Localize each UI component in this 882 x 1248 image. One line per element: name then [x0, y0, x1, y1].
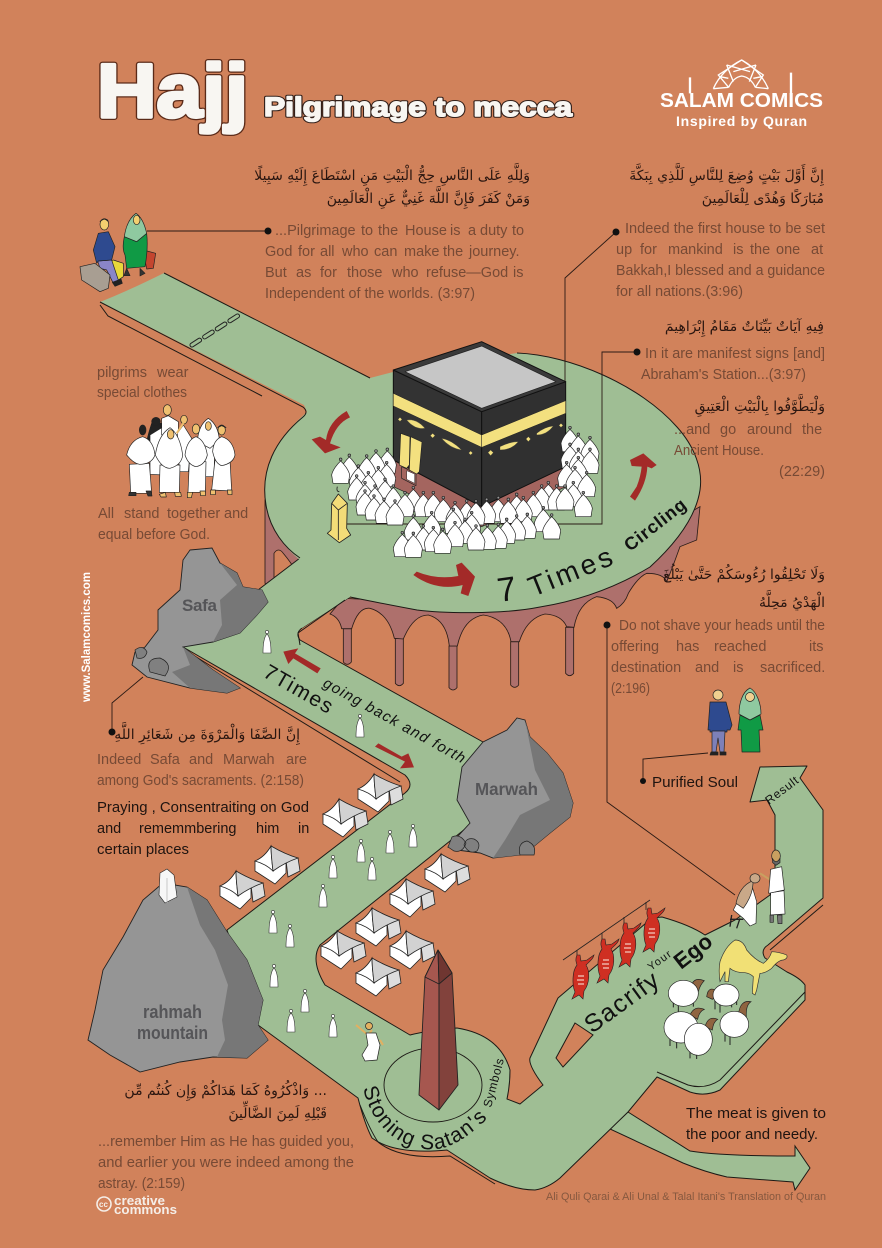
abraham's station verse: فِيهِ آيَاتٌ بَيِّنَاتٌ مَقَامُ إِبْرَاهِيمَ — [665, 318, 824, 337]
verse text 3:96: at — [811, 242, 823, 258]
label: sacrify your ego — [579, 773, 802, 1039]
equality note — [98, 506, 248, 543]
abraham's station verse: Abraham's Station...(3:97) — [641, 367, 806, 383]
salam comics logo: SALAM COMICS — [660, 90, 823, 112]
verse text 3:97: duty — [480, 223, 508, 239]
red arrows on the safa-marwah road — [283, 648, 414, 768]
verse text 3:97: journey. — [468, 244, 520, 260]
abraham's station verse: In it are manifest signs [and] — [645, 346, 825, 362]
circling verse 22:29: the — [802, 422, 822, 438]
arches under circling platform — [265, 500, 700, 690]
verse text 3:97 — [264, 223, 524, 302]
label: stoning satan's symbols — [364, 1057, 507, 1150]
title: Hajj — [97, 49, 248, 134]
purified man and woman — [708, 688, 763, 755]
circling verse 22:29: go — [720, 422, 736, 438]
verse text 3:97: refuse—God — [426, 265, 508, 281]
arabic verse 3:97: وَلِلَّهِ عَلَى النَّاسِ حِجُّ الْبَيْتِ مَنِ اسْتَطَاعَ إِلَيْهِ سَبِيلًا — [254, 163, 530, 186]
verse text 3:96: mankind — [668, 242, 723, 258]
label: going back and forth: 7Times — [260, 660, 337, 718]
arabic verse 3:96: إِنَّ أَوَّلَ بَيْتٍ وُضِعَ لِلنَّاسِ لَلَّذِي بِبَكَّةَ — [629, 163, 825, 186]
remember verse 2:159: astray. (2:159) — [98, 1176, 185, 1192]
arabic verse 3:97: وَمَنْ كَفَرَ فَإِنَّ اللَّهَ غَنِيٌّ عَنِ الْعَالَمِينَ — [327, 186, 530, 209]
label: sacrify your ego: Sacrify — [579, 966, 665, 1039]
shaving verse 2:196: and — [695, 660, 719, 676]
label: 7 times circling: 7 — [495, 570, 519, 610]
verse text 3:96: for — [640, 242, 657, 258]
label: stoning satan's symbols: Stoning Satan's — [364, 1086, 486, 1150]
verse text 3:97: a — [468, 223, 477, 239]
circling verse 22:29: Ancient House. — [674, 443, 764, 459]
verse text 3:97: those — [347, 265, 382, 281]
abraham's station verse — [634, 318, 825, 383]
verse text 3:97: to — [512, 223, 524, 239]
road and platform edge lines — [100, 273, 823, 1184]
verse text 3:96: up — [616, 242, 632, 258]
verse text 3:97: Independent of the worlds. (3:97) — [265, 286, 475, 302]
translation credit: Ali Quli Qarai & Ali Unal & Talal Itani's Translation of Quran — [546, 1191, 826, 1203]
sheep flock — [664, 979, 751, 1059]
creative commons mark: commons — [114, 1202, 177, 1217]
praying note: him — [256, 821, 279, 837]
verse text 3:97: all — [320, 244, 335, 260]
traveling pilgrims with luggage — [80, 213, 156, 292]
safa marwah verse 2:158: Safa — [150, 752, 181, 768]
verse text 3:97: House — [405, 223, 447, 239]
shaving verse 2:196: destination — [611, 660, 681, 676]
maqam ibrahim — [327, 487, 351, 543]
leader lines — [112, 231, 735, 895]
circling verse 22:29: (22:29) — [779, 464, 825, 480]
praying note: certain places — [97, 842, 189, 858]
verse text 3:97: for — [320, 265, 337, 281]
road dashes — [192, 315, 239, 345]
pilgrims clothing note: wear — [156, 365, 189, 381]
pilgrims clothing note — [97, 365, 189, 401]
verse text 3:97: is — [513, 265, 523, 281]
rahmah mountain: rahmah — [143, 1002, 202, 1022]
arabic verse 3:97 — [254, 163, 530, 209]
praying note: Praying , Consentraiting on God — [97, 800, 309, 816]
circling verse 22:29 — [674, 394, 825, 480]
shaving verse 2:196 — [604, 564, 825, 697]
pilgrims clothing note: special clothes — [97, 385, 187, 401]
shaving verse 2:196: has — [676, 639, 699, 655]
shaving verse 2:196: offering — [611, 639, 659, 655]
red arrows around the kaaba — [312, 411, 657, 596]
verse text 3:96: Indeed the first house to be set — [625, 221, 825, 237]
white-robed pilgrims group — [127, 405, 235, 498]
tents — [220, 774, 470, 996]
safa rock — [132, 548, 268, 693]
salam comics logo — [660, 60, 823, 129]
green pilgrimage route — [183, 558, 823, 1190]
salam comics logo: Inspired by Quran — [676, 113, 807, 129]
circling verse 22:29: وَلْيَطَّوَّفُوا بِالْبَيْتِ الْعَتِيقِ — [695, 394, 825, 417]
verse text 3:96: one — [776, 242, 800, 258]
safa marwah verse 2:158: Indeed — [97, 752, 141, 768]
verse text 3:97: who — [391, 265, 419, 281]
carcasses on rope — [563, 900, 665, 999]
shaving verse 2:196: its — [809, 639, 824, 655]
title: Hajj — [97, 49, 248, 134]
label: 7 times circling: Times — [524, 541, 617, 603]
safa marwah verse 2:158: إِنَّ الصَّفَا وَالْمَرْوَةَ مِن شَعَائِرِ اللَّهِ — [114, 722, 301, 745]
shaving verse 2:196: Do not shave your heads until the — [619, 618, 825, 634]
stoning ring — [384, 1048, 482, 1122]
verse text 3:97: is — [450, 223, 460, 239]
label: stoning satan's symbols: Symbols — [480, 1057, 507, 1109]
praying note — [97, 800, 309, 858]
remember verse 2:159: قَبْلِهِ لَمِنَ الضَّالِّينَ — [228, 1101, 327, 1122]
label: sacrify your ego: Ego — [669, 928, 717, 974]
website url: www.Salamcomics.com — [81, 572, 93, 703]
verse text 3:97: who — [341, 244, 369, 260]
equality note: stand — [124, 506, 159, 522]
pilgrim crowd circling the kaaba — [332, 426, 599, 557]
camel — [719, 940, 787, 995]
rahmah mountain — [88, 869, 268, 1072]
label: going back and forth: going back and forth — [320, 675, 468, 767]
equality note: and — [224, 506, 248, 522]
title — [97, 49, 573, 134]
verse text 3:97: But — [265, 265, 287, 281]
safa marwah verse 2:158: and — [189, 752, 213, 768]
marwah rock — [448, 718, 573, 858]
safa marwah verse 2:158: are — [286, 752, 307, 768]
stone-throwing pilgrim — [356, 1022, 383, 1061]
kaaba — [393, 342, 566, 527]
verse text 3:97: the — [378, 223, 398, 239]
title: Pilgrimage to mecca — [264, 92, 573, 122]
circling verse 22:29: around — [747, 422, 792, 438]
verse text 3:96: Bakkah,I blessed and a guidance — [616, 263, 825, 279]
arrow: meat to the poor — [610, 1112, 810, 1190]
safa marwah verse 2:158: Marwah — [223, 752, 275, 768]
verse text 3:97: for — [298, 244, 315, 260]
arabic verse 3:96: مُبَارَكًا وَهُدًى لِلْعَالَمِينَ — [702, 188, 824, 207]
route hole beside sacrifice platform — [556, 1023, 593, 1067]
label: going back and forth — [260, 660, 468, 767]
head-shaving pair — [730, 850, 785, 928]
meat note — [686, 1106, 826, 1143]
circling platform and entry road — [100, 273, 701, 628]
label: sacrify your ego: Result — [762, 773, 802, 807]
verse text 3:97: as — [296, 265, 311, 281]
shaving verse 2:196: sacrificed. — [760, 660, 825, 676]
verse text 3:96 — [612, 221, 825, 300]
title: Pilgrimage to mecca — [264, 92, 573, 122]
remember verse 2:159: and earlier you were indeed among the — [98, 1155, 354, 1171]
label: 7 times circling — [495, 494, 690, 610]
purified soul label: Purified Soul — [652, 775, 738, 791]
safa rock: Safa — [182, 596, 218, 615]
equality note: All — [98, 506, 114, 522]
verse text 3:97: make — [404, 244, 439, 260]
creative commons mark: creative — [114, 1193, 165, 1208]
pilgrims clothing note: pilgrims — [97, 365, 147, 381]
shaving verse 2:196: (2:196) — [611, 681, 650, 697]
remember verse 2:159: ...remember Him as He has guided you, — [98, 1134, 354, 1150]
safa marwah verse 2:158: among God's sacraments. (2:158) — [97, 773, 304, 789]
remember verse 2:159: ... وَاذْكُرُوهُ كَمَا هَدَاكُمْ وَإِن كُنتُم مِّن — [124, 1081, 327, 1101]
satan obelisk — [419, 950, 458, 1110]
equality note: equal before God. — [98, 527, 210, 543]
shaving verse 2:196: الْهَدْيُ مَحِلَّهُ — [759, 590, 825, 611]
verse text 3:96: for all nations.(3:96) — [616, 284, 743, 300]
small pilgrims on the road — [263, 630, 417, 1037]
verse text 3:97: can — [374, 244, 397, 260]
shaving verse 2:196: is — [733, 660, 743, 676]
praying note: in — [298, 821, 309, 837]
praying note: rememmbering — [139, 821, 236, 837]
meat note: The meat is given to — [686, 1106, 826, 1122]
label: 7 times circling: Circling — [620, 494, 690, 555]
verse text 3:97: to — [361, 223, 373, 239]
meat note: the poor and needy. — [686, 1127, 818, 1143]
rahmah mountain: mountain — [137, 1023, 208, 1043]
label: sacrify your ego: Your — [646, 948, 674, 973]
remember verse 2:159 — [98, 1081, 354, 1192]
praying note: and — [97, 821, 121, 837]
marwah rock: Marwah — [475, 779, 538, 799]
arabic verse 3:96 — [629, 163, 825, 207]
equality note: together — [167, 506, 220, 522]
verse text 3:96: the — [750, 242, 770, 258]
shaving verse 2:196: وَلَا تَحْلِقُوا رُءُوسَكُمْ حَتَّىٰ يَبْلُغَ — [663, 564, 825, 583]
circling verse 22:29: ...and — [674, 422, 710, 438]
shaving verse 2:196: reached — [714, 639, 766, 655]
creative commons mark — [97, 1193, 177, 1217]
verse text 3:97: God — [265, 244, 292, 260]
creative commons mark: cc — [99, 1200, 108, 1209]
verse text 3:96: is — [733, 242, 743, 258]
verse text 3:97: ...Pilgrimage — [275, 223, 356, 239]
safa marwah verse 2:158 — [97, 722, 307, 789]
verse text 3:97: the — [443, 244, 463, 260]
